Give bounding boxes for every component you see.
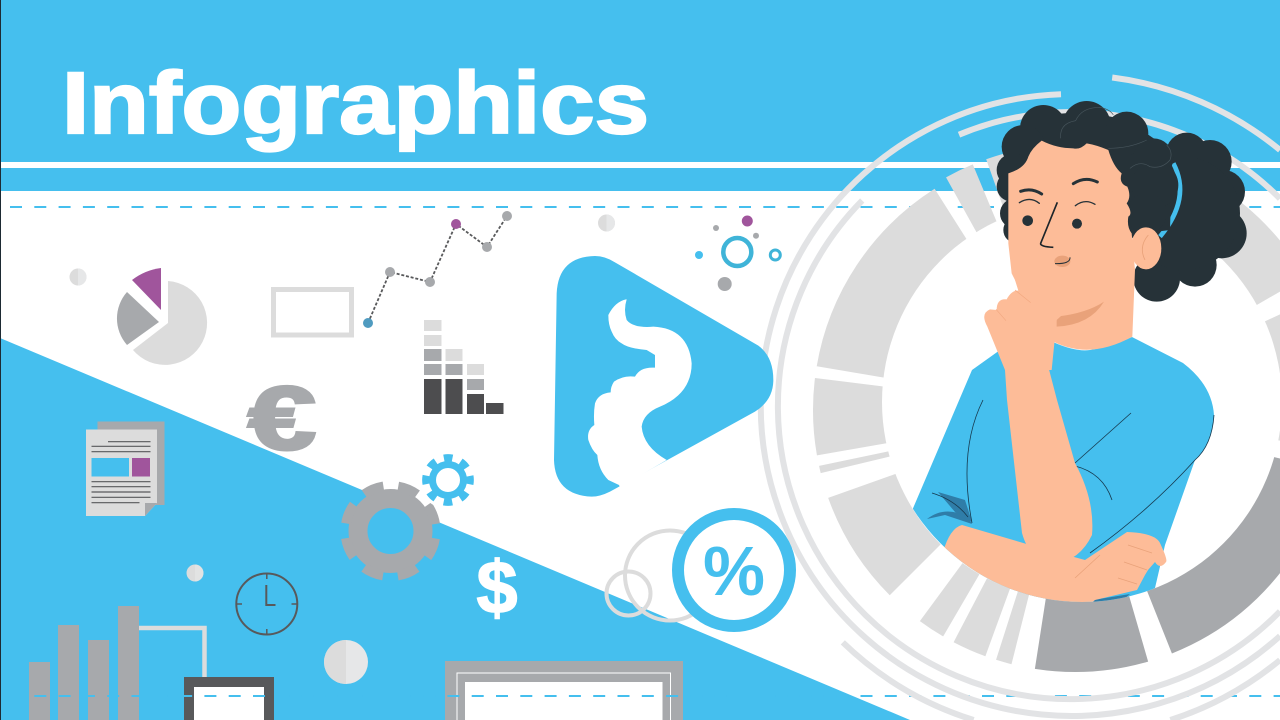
title: Infographics xyxy=(62,55,649,152)
icon: percent badge xyxy=(678,514,790,626)
blue diagonal background xyxy=(0,338,910,720)
pie chart xyxy=(117,268,207,365)
hand on chin xyxy=(984,276,1088,370)
connector line xyxy=(139,628,204,678)
icon: document pages xyxy=(86,422,164,516)
shirt fold lines xyxy=(932,400,1214,553)
stacked bar chart xyxy=(424,320,504,414)
icon: small dot above logo xyxy=(598,214,615,232)
outer thin rings xyxy=(761,78,1280,720)
large monitor xyxy=(445,661,683,720)
inner white disc xyxy=(882,202,1280,602)
hair bun xyxy=(1127,133,1247,302)
hair mass xyxy=(997,101,1178,243)
eyebrows and eyelids xyxy=(1019,179,1097,206)
icon: bubbles cluster xyxy=(695,216,780,291)
eyes xyxy=(1022,215,1082,229)
icon: overlapping circles xyxy=(606,530,715,620)
icon: small dot top left xyxy=(70,268,86,286)
icon: small dot xyxy=(186,564,204,582)
icon: clock xyxy=(236,574,297,634)
dial ring segments xyxy=(849,185,1280,636)
device box xyxy=(184,677,274,720)
head, hair and hand xyxy=(984,101,1178,370)
hair band xyxy=(1160,163,1180,237)
upper arm resting xyxy=(1003,335,1092,564)
ear xyxy=(1131,227,1161,269)
chin shadow xyxy=(1057,302,1104,327)
person thinking xyxy=(911,101,1247,620)
icon: large grey gear xyxy=(346,486,436,576)
icon: dollar sign: $ xyxy=(476,546,518,629)
line chart xyxy=(363,211,512,328)
icon: percent badge: % xyxy=(703,532,765,610)
top blue banner xyxy=(0,0,1280,191)
lower arm and fist xyxy=(944,525,1166,602)
icon: large dot xyxy=(324,640,368,684)
mouth xyxy=(1054,256,1070,267)
empty rectangle frame xyxy=(274,290,352,335)
icon: small blue gear xyxy=(419,451,477,509)
bar chart bottom left xyxy=(29,606,139,720)
icon: euro sign: € xyxy=(248,368,316,468)
shirt xyxy=(911,337,1214,620)
logo: rounded play triangle with tentacle xyxy=(554,256,773,497)
neck and face xyxy=(1008,141,1135,350)
nose xyxy=(1041,202,1057,247)
